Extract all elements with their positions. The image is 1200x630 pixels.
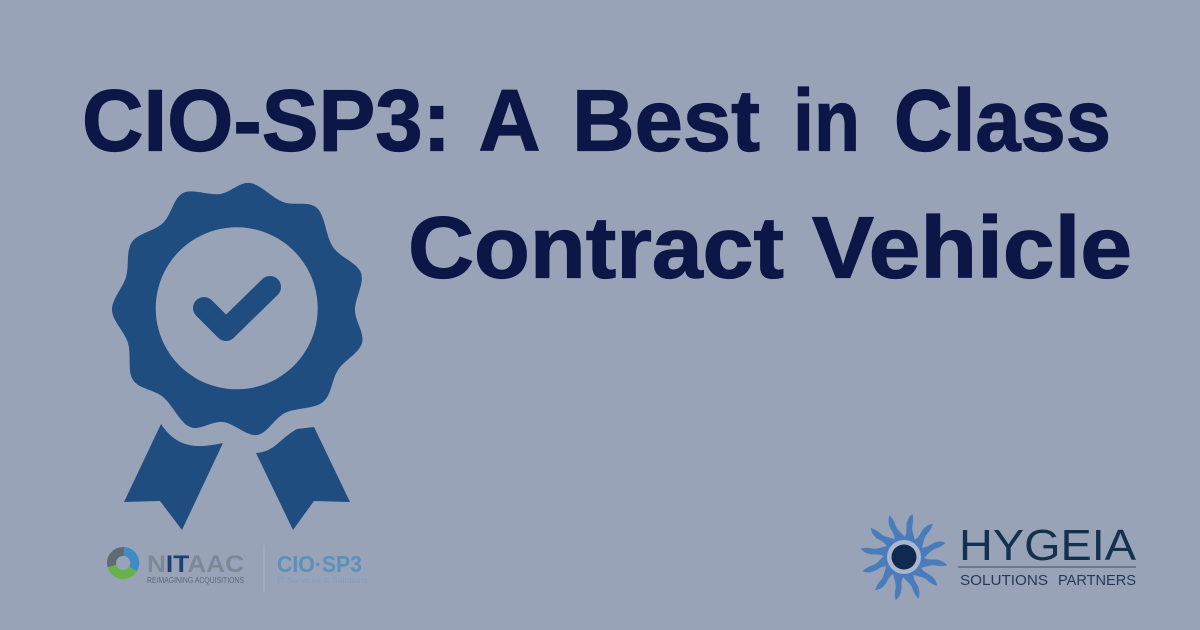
Hygeia tagline: SOLUTIONS (960, 572, 1048, 589)
title: A (478, 72, 540, 170)
title: Contract (408, 200, 784, 296)
title: in (793, 72, 860, 170)
logo: CIO-SP3: IT Services & Solutions (277, 576, 368, 585)
NITAAC tagline: REIMAGINING ACQUISITIONS (147, 576, 244, 585)
title: CIO-SP3: (82, 72, 451, 170)
title: Best (572, 72, 760, 170)
icon: NITAAC ring (112, 551, 135, 575)
title: Class (894, 72, 1111, 170)
logo: CIO-SP3: CIO·SP3 (277, 551, 362, 577)
logo: NITAAC (112, 551, 244, 585)
Hygeia wordmark: HYGEIA (959, 521, 1137, 570)
Hygeia tagline (960, 572, 1136, 589)
icon: award rosette with check mark (112, 183, 363, 530)
title: Vehicle (812, 200, 1132, 296)
logo divider (264, 545, 265, 592)
NITAAC wordmark: NITAAC (147, 551, 244, 578)
logo: Hygeia Solutions Partners (860, 513, 1137, 601)
title (82, 72, 1132, 296)
Hygeia tagline: PARTNERS (1058, 572, 1136, 589)
icon: Hygeia sun (860, 513, 948, 601)
